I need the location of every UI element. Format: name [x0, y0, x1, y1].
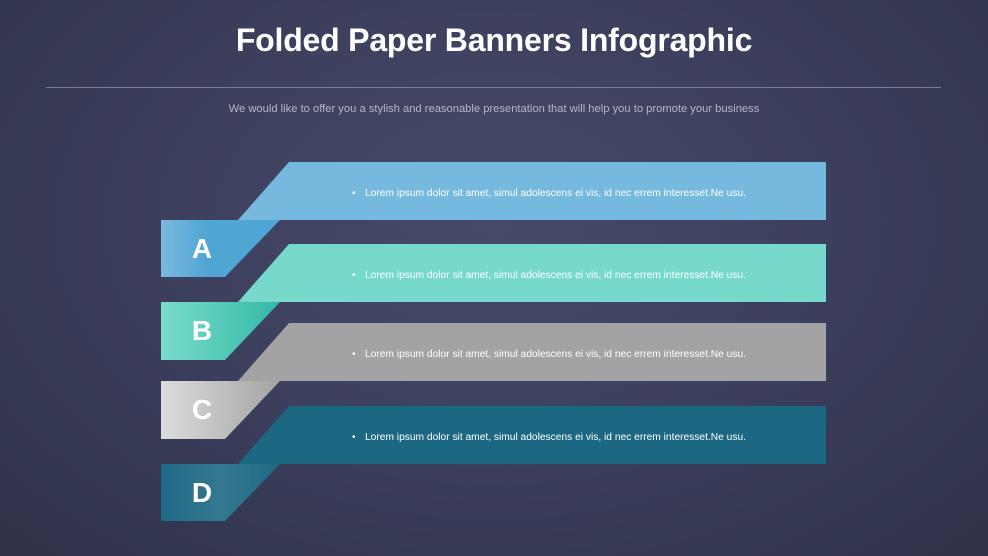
- banner B: Lorem ipsum dolor sit amet, simul adolescens ei vis, id nec errem interesset.Ne usu.: [365, 270, 746, 281]
- banner C: •: [352, 349, 356, 360]
- banner B: B: [192, 315, 212, 346]
- banner C: C: [192, 394, 212, 425]
- banner A: Lorem ipsum dolor sit amet, simul adolescens ei vis, id nec errem interesset.Ne usu.: [365, 188, 746, 199]
- banner B: [161, 244, 826, 360]
- subtitle: We would like to offer you a stylish and reasonable presentation that will help you to promote your business: [229, 103, 759, 115]
- banner D: D: [192, 477, 212, 508]
- banner A: •: [352, 188, 356, 199]
- banner D: •: [352, 432, 356, 443]
- banner A: A: [192, 233, 212, 264]
- banner D: [161, 406, 826, 521]
- banner A: [161, 162, 826, 277]
- banner B: •: [352, 270, 356, 281]
- title: Folded Paper Banners Infographic: [236, 22, 752, 58]
- banner D: Lorem ipsum dolor sit amet, simul adolescens ei vis, id nec errem interesset.Ne usu.: [365, 432, 746, 443]
- banner C: [161, 323, 826, 439]
- banner C: Lorem ipsum dolor sit amet, simul adolescens ei vis, id nec errem interesset.Ne usu.: [365, 349, 746, 360]
